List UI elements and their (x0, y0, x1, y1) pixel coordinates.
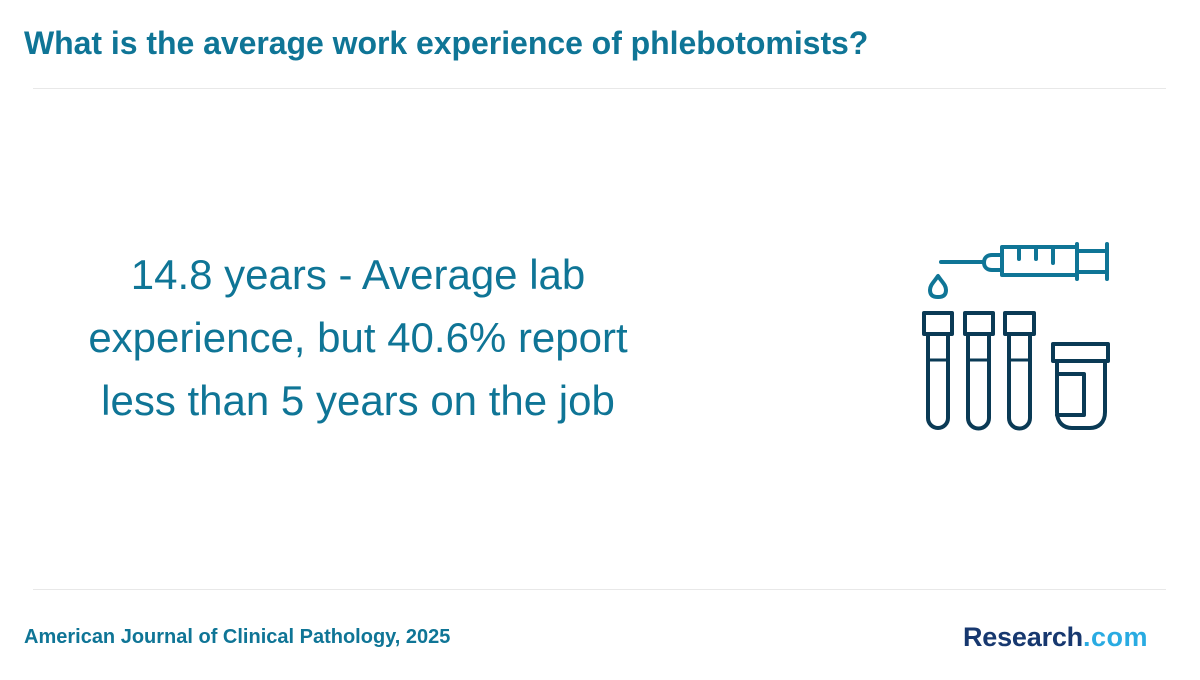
source citation: American Journal of Clinical Pathology, 2025 (24, 626, 450, 648)
icon: blood drop (930, 276, 946, 297)
icon: test tubes (924, 313, 1034, 428)
main statement: less than 5 years on the job (101, 377, 615, 424)
title: What is the average work experience of phlebotomists? (24, 25, 868, 61)
icon: sample jar (1053, 344, 1108, 428)
logo: Research.com: Research.com (963, 622, 1148, 652)
main statement: 14.8 years - Average lab (131, 251, 585, 298)
main statement: experience, but 40.6% report (88, 314, 628, 361)
main statement (88, 251, 628, 424)
icon: syringe (941, 244, 1107, 279)
icon: syringe, blood drop, test tubes and sample jar (922, 242, 1110, 430)
